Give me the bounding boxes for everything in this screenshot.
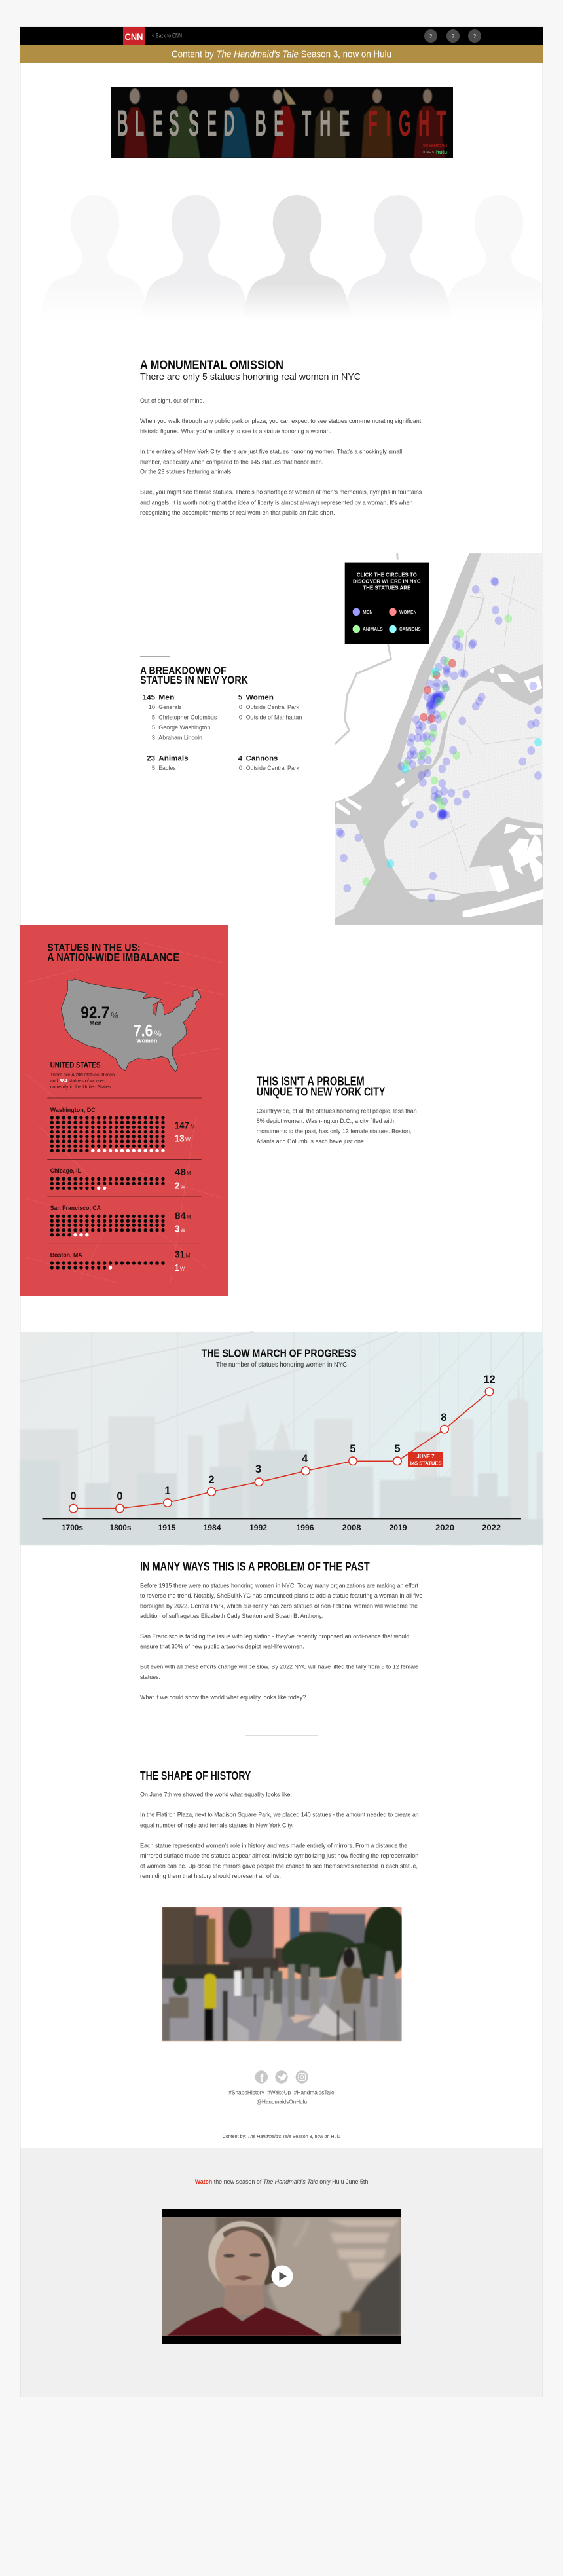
- body text: ensure that 30% of new public artworks depict real-life women.: [140, 1643, 304, 1649]
- men list: Abraham Lincoln: [158, 734, 202, 741]
- heading: A MONUMENTAL OMISSION: [140, 358, 283, 371]
- cannons list: [238, 754, 299, 771]
- section: the shape of history: [140, 1769, 419, 1879]
- sponsor credit: Content by: The Handmaid's Tale Season 3, now on Hulu: [223, 2133, 340, 2139]
- inner right silhouette: [342, 195, 454, 323]
- axis labels: 1984: [203, 1523, 221, 1532]
- banner show logo: THE HANDMAID'S TALE: [423, 144, 447, 148]
- centre silhouette: [242, 195, 353, 323]
- city: Washington DC: W: [185, 1137, 191, 1143]
- skyline background: [20, 1332, 543, 1545]
- banner show logo: hulu: [436, 149, 447, 155]
- body text: historic figures. What you’re unlikely to see is a statue honoring a woman.: [140, 428, 331, 435]
- city: Boston: 31: [175, 1249, 185, 1260]
- panel: statues in the US: [20, 925, 228, 1296]
- body text: 8% depict women. Wash-ington D.C., a city filled with: [257, 1118, 394, 1124]
- banner show logo: [422, 144, 447, 155]
- body text: number, especially when compared to the 145 statues that honor men.: [140, 458, 323, 465]
- outer right silhouette: [443, 195, 543, 323]
- inner left silhouette: [140, 195, 251, 323]
- cannons list: Cannons: [246, 754, 278, 762]
- stat: women percent: 7.6: [134, 1022, 153, 1040]
- heading: STATUES IN NEW YORK: [140, 674, 248, 686]
- photo: mirrored statues in Flatiron Plaza: [162, 1907, 402, 2042]
- data values: 8: [441, 1412, 447, 1424]
- axis labels: 1800s: [110, 1523, 132, 1532]
- heading: THIS ISN'T A PROBLEM: [257, 1075, 365, 1088]
- data values: 1: [164, 1485, 171, 1497]
- back link: < Back to CNN: [152, 33, 182, 39]
- women list: Women: [246, 693, 274, 701]
- animals list: 23: [147, 754, 155, 762]
- map circles: cannons: [386, 667, 542, 868]
- axis labels: 1992: [249, 1523, 267, 1532]
- body text: In the entirety of New York City, there are just five statues honoring women. That’s a shockingly small: [140, 449, 402, 455]
- legend title: DISCOVER WHERE IN NYC: [353, 578, 421, 584]
- stat: men percent: [81, 1004, 118, 1027]
- chart title: THE SLOW MARCH OF PROGRESS: [202, 1347, 357, 1360]
- body text: Before 1915 there were no statues honoring women in NYC. Today many organizations are making an effort: [140, 1582, 418, 1589]
- body text: Atlanta and Columbus each have just one.: [257, 1138, 365, 1145]
- united states text: and 384 statues of women: [50, 1078, 105, 1084]
- body text: boroughs by 2022. Central Park, which cur-rently has zero statues of non-fictional women will welcome the: [140, 1602, 418, 1609]
- sponsor bar: Content by The Handmaid's Tale Season 3, now on Hulu: [172, 50, 391, 60]
- heading: A BREAKDOWN OF: [140, 665, 227, 676]
- banner headline: THE: [302, 103, 350, 144]
- stat: women percent: Women: [136, 1038, 157, 1045]
- city: Boston: W: [180, 1266, 185, 1272]
- city: Washington DC: 147: [175, 1120, 189, 1131]
- axis labels: 2019: [389, 1523, 407, 1532]
- CNN logo: [123, 27, 145, 48]
- watch call to action: Watch the new season of The Handmaid's Tale only Hulu June 5th: [195, 2179, 368, 2186]
- data values: 5: [350, 1443, 356, 1455]
- body text: recognizing the accomplishments of real wom-en that public art falls short.: [140, 509, 335, 516]
- united states text: UNITED STATES: [50, 1061, 100, 1070]
- city: Washington DC: 13: [175, 1133, 185, 1145]
- trend line: [73, 1391, 490, 1509]
- body text: statues.: [140, 1674, 160, 1680]
- heading: [257, 1075, 385, 1098]
- axis labels: 2020: [435, 1523, 454, 1532]
- axis labels: 2022: [482, 1523, 501, 1532]
- header bar: [20, 27, 543, 48]
- panel: watch section: [21, 2148, 542, 2397]
- panel title: A NATION-WIDE IMBALANCE: [47, 951, 179, 964]
- legend title: CLICK THE CIRCLES TO: [357, 571, 417, 578]
- men list: [143, 693, 217, 741]
- city: Boston: Boston, MA: [50, 1252, 82, 1259]
- CNN logo: CNN: [124, 32, 143, 42]
- US map: [61, 979, 201, 1072]
- icon: facebook: f: [260, 2073, 264, 2084]
- section: problem of the past: [140, 1560, 422, 1701]
- body text: When you walk through any public park or plaza, you can expect to see statues com-memorating significant: [140, 418, 422, 424]
- section: not unique to NYC: [257, 1075, 417, 1145]
- city: Chicago: 48: [175, 1167, 186, 1178]
- men list: George Washington: [158, 724, 210, 731]
- banner show logo: JUNE 5: [422, 151, 434, 155]
- city: Chicago: 2: [175, 1180, 179, 1191]
- city: Washington DC: [50, 1107, 195, 1150]
- video player: [162, 2209, 401, 2344]
- hashtags: @HandmaidsOnHulu: [257, 2098, 307, 2105]
- section: breakdown of statues: [140, 656, 302, 771]
- legend title: [353, 571, 421, 591]
- women list: 0: [239, 714, 242, 720]
- united states text: [50, 1061, 115, 1090]
- legend: cannons: CANNONS: [399, 627, 421, 632]
- data values: 5: [394, 1443, 401, 1455]
- body text: Countrywide, of all the statues honoring real people, less than: [257, 1107, 417, 1114]
- share icons: ?: [473, 33, 477, 39]
- stat: men percent: %: [111, 1010, 118, 1020]
- women list: Outside Central Park: [246, 704, 299, 710]
- hashtags: #ShapeHistory #WakeUp #HandmaidsTale: [228, 2089, 335, 2095]
- united states text: currently in the United States.: [50, 1084, 113, 1090]
- icon: instagram: [296, 2070, 308, 2084]
- hashtags: [228, 2089, 335, 2105]
- legend: animals: ANIMALS: [363, 627, 383, 632]
- body text: [257, 1107, 417, 1145]
- banner headline: FIGHT: [368, 103, 446, 144]
- city: Chicago: Chicago, IL: [50, 1168, 81, 1174]
- body text: In the Flatiron Plaza, next to Madison Square Park, we placed 140 statues - the amount needed to create an: [140, 1812, 419, 1818]
- map circles: men: [336, 577, 542, 902]
- men list: 5: [152, 724, 155, 731]
- city: San Francisco: W: [181, 1227, 185, 1234]
- body text: San Francisco is tackling the issue with legislation - they’ve recently proposed an ordi-nance that would: [140, 1633, 409, 1640]
- cannons list: Outside Central Park: [246, 765, 299, 771]
- city: San Francisco: 3: [175, 1224, 179, 1235]
- city: Chicago: M: [187, 1170, 191, 1177]
- body text: to reverse the trend. Notably, SheBuiltNYC has announced plans to add a statue featuring a woman in all five: [140, 1592, 422, 1599]
- share icons: [424, 29, 481, 43]
- section: a monumental omission: [140, 358, 422, 516]
- body text: [140, 397, 422, 516]
- city: San Francisco: [50, 1205, 191, 1235]
- animals list: [147, 754, 189, 771]
- city: Washington DC: Washington, DC: [50, 1107, 96, 1113]
- map circles: animals: [362, 614, 512, 886]
- social icons: [255, 2070, 308, 2084]
- chart: slow march of progress: [20, 1332, 543, 1545]
- body text: Or the 23 statues featuring animals.: [140, 469, 233, 475]
- banner headline: [117, 103, 446, 144]
- outer left silhouette: [39, 195, 151, 323]
- body text: equal number of male and female statues in New York City.: [140, 1822, 293, 1828]
- icon: twitter: [275, 2070, 288, 2084]
- body text: addition of suffragettes Elizabeth Cady Stanton and Susan B. Anthony.: [140, 1613, 323, 1619]
- panel title: STATUES IN THE US:: [47, 942, 141, 954]
- men list: Christopher Colombus: [158, 714, 217, 720]
- animals list: Eagles: [158, 765, 176, 771]
- subheading: There are only 5 statues honoring real women in NYC: [140, 372, 361, 382]
- legend title: THE STATUES ARE: [363, 584, 411, 591]
- animals list: Animals: [158, 754, 189, 762]
- body text: of women can be. Up close the mirrors gave people the chance to see themselves reflected in each statue,: [140, 1862, 418, 1869]
- cannons list: 0: [239, 765, 242, 771]
- cannons list: 4: [238, 754, 243, 762]
- body text: Sure, you might see female statues. There’s no shortage of women at men’s memorials, nymphs in fountains: [140, 489, 422, 496]
- heading: THE SHAPE OF HISTORY: [140, 1769, 251, 1782]
- men list: Generals: [158, 704, 182, 710]
- women list: 0: [239, 704, 242, 710]
- city: San Francisco: San Francisco, CA: [50, 1205, 101, 1211]
- axis labels: 1996: [296, 1523, 314, 1532]
- body text: [140, 1792, 419, 1879]
- city: Boston: M: [186, 1253, 190, 1259]
- data values: [70, 1374, 496, 1502]
- heading: [140, 665, 248, 686]
- body text: [140, 1582, 422, 1701]
- stat: women percent: [134, 1022, 162, 1045]
- city: Washington DC: M: [191, 1123, 195, 1130]
- men list: 5: [152, 714, 155, 720]
- panel title: [47, 942, 179, 964]
- banner headline: BLESSED: [117, 103, 235, 144]
- axis labels: [62, 1523, 501, 1532]
- body text: On June 7th we showed the world what equality looks like.: [140, 1792, 292, 1798]
- body text: What if we could show the world what equality looks like today?: [140, 1694, 306, 1701]
- data values: 3: [255, 1463, 261, 1475]
- callout: June 7: 145 STATUES: [410, 1460, 442, 1467]
- city: Boston: 1: [175, 1262, 179, 1274]
- body text: and angels. It is worth noting that the idea of liberty is almost al-ways represented by a woman. It’s when: [140, 499, 413, 506]
- city: Chicago: W: [181, 1183, 185, 1190]
- banner: Blessed Be The Fight: [111, 87, 453, 158]
- data values: 0: [117, 1490, 123, 1502]
- banner figures: [124, 88, 445, 158]
- animals list: 5: [152, 765, 155, 771]
- callout: June 7: JUNE 7: [416, 1453, 435, 1460]
- women list: 5: [238, 693, 242, 701]
- legend: men: MEN: [363, 610, 372, 615]
- data values: 12: [483, 1374, 496, 1386]
- city: San Francisco: M: [187, 1214, 191, 1221]
- stat: women percent: %: [154, 1029, 162, 1039]
- axis labels: 1700s: [62, 1523, 83, 1532]
- map of NYC statues: [335, 553, 543, 925]
- body text: Out of sight, out of mind.: [140, 397, 204, 404]
- sponsor bar: [20, 45, 543, 63]
- body text: mirrored surface made the statues appear almost invisible symbolizing just how fleeting the representation: [140, 1852, 418, 1859]
- body text: Each statue represented women’s role in history and was made entirely of mirrors. From a distance the: [140, 1842, 407, 1849]
- women list: Outside of Manhattan: [246, 714, 302, 720]
- share icons: ?: [452, 33, 455, 39]
- legend: women: WOMEN: [399, 610, 416, 615]
- axis: [42, 1518, 521, 1519]
- city: Chicago: [50, 1167, 191, 1191]
- share icons: ?: [429, 33, 433, 39]
- data values: 0: [70, 1490, 77, 1502]
- data points: [69, 1388, 494, 1513]
- women list: [238, 693, 302, 720]
- data values: 4: [302, 1453, 308, 1465]
- stat: men percent: Men: [89, 1020, 102, 1027]
- men list: 3: [152, 734, 155, 741]
- heading: UNIQUE TO NEW YORK CITY: [257, 1085, 385, 1098]
- stat: men percent: 92.7: [81, 1004, 109, 1022]
- banner headline: BE: [255, 103, 284, 144]
- chart subtitle: The number of statues honoring women in NYC: [216, 1361, 347, 1369]
- map legend: [345, 563, 429, 644]
- play button: [271, 2266, 293, 2287]
- body text: monuments to the past, has only 13 female statues. Boston,: [257, 1128, 411, 1134]
- men list: 145: [143, 693, 155, 701]
- men list: Men: [158, 693, 175, 701]
- city: Boston: [50, 1249, 190, 1274]
- united states text: There are 4,799 statues of men: [50, 1072, 115, 1078]
- data values: 2: [208, 1474, 215, 1486]
- city: San Francisco: 84: [175, 1211, 187, 1222]
- heading: IN MANY WAYS THIS IS A PROBLEM OF THE PAST: [140, 1560, 370, 1573]
- axis labels: 2008: [342, 1523, 361, 1532]
- callout: June 7: [408, 1452, 443, 1467]
- body text: reminding them that history should represent all of us.: [140, 1873, 281, 1879]
- silhouettes of statues: [21, 195, 543, 326]
- map circles: women: [420, 659, 456, 723]
- axis labels: 1915: [158, 1523, 176, 1532]
- body text: But even with all these efforts change will be slow. By 2022 NYC will have lifted the tally from 5 to 12 female: [140, 1663, 418, 1670]
- men list: 10: [149, 704, 155, 710]
